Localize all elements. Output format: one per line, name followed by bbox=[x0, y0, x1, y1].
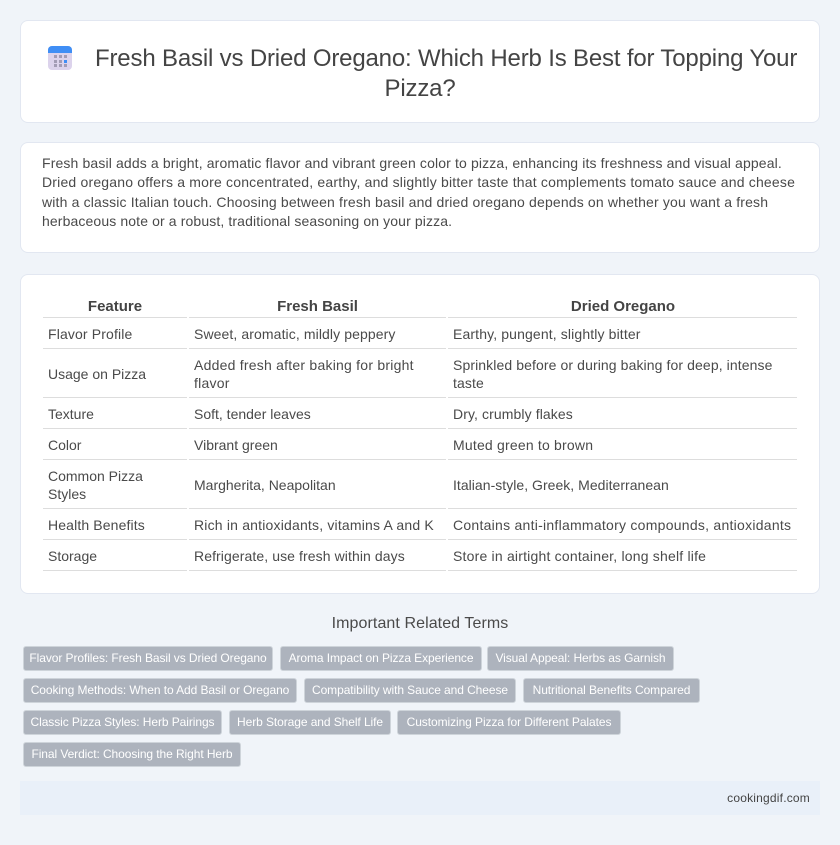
row: storage: Storage bbox=[48, 548, 97, 564]
row: texture: Texture bbox=[48, 406, 94, 422]
row: usage on pizza: flavor bbox=[194, 375, 230, 391]
icon: calendar bbox=[48, 46, 72, 70]
tags: related terms: Nutritional Benefits Compared bbox=[533, 683, 690, 697]
tags: related terms: Herb Storage and Shelf Life bbox=[237, 715, 383, 729]
row: storage bbox=[48, 548, 706, 564]
text block: intro: herbaceous note or a robust, traditional seasoning on your pizza. bbox=[42, 213, 452, 229]
row: flavor profile: Sweet, aromatic, mildly peppery bbox=[194, 326, 396, 342]
row: health benefits: Rich in antioxidants, vitamins A and K bbox=[194, 517, 434, 533]
row: flavor profile bbox=[48, 326, 641, 342]
text block: intro: Fresh basil adds a bright, aromatic flavor and vibrant green color to pizza, enhancing its freshness and visual appeal. bbox=[42, 155, 782, 171]
row: texture: Dry, crumbly flakes bbox=[453, 406, 573, 422]
table: feature comparison bbox=[43, 298, 797, 571]
row: common pizza styles: Margherita, Neapolitan bbox=[194, 477, 336, 493]
row: flavor profile: Earthy, pungent, slightly bitter bbox=[453, 326, 641, 342]
row: common pizza styles: Styles bbox=[48, 486, 86, 502]
row: usage on pizza: Sprinkled before or during baking for deep, intense bbox=[453, 357, 773, 373]
row: color: Vibrant green bbox=[194, 437, 278, 453]
row: texture bbox=[48, 406, 573, 422]
table header bbox=[88, 298, 675, 315]
tags: related terms: Classic Pizza Styles: Herb Pairings bbox=[31, 715, 214, 729]
tags: related terms: Compatibility with Sauce and Cheese bbox=[312, 683, 508, 697]
row: color: Muted green to brown bbox=[453, 437, 593, 453]
row: health benefits: Health Benefits bbox=[48, 517, 145, 533]
row: texture: Soft, tender leaves bbox=[194, 406, 311, 422]
text block: intro: with a classic Italian touch. Choosing between fresh basil and dried oregano depends on whether you want a fresh bbox=[42, 194, 768, 210]
row: color bbox=[48, 437, 593, 453]
panel: comparison table bbox=[20, 274, 820, 594]
tags: related terms: Final Verdict: Choosing the Right Herb bbox=[31, 747, 233, 761]
table header: Feature bbox=[88, 298, 142, 315]
row: health benefits: Contains anti-inflammatory compounds, antioxidants bbox=[453, 517, 791, 533]
title: Fresh Basil vs Dried Oregano: Which Herb Is Best for Topping Your bbox=[95, 45, 797, 72]
footer source: cookingdif.com bbox=[727, 791, 810, 805]
text block: intro: Dried oregano offers a more concentrated, earthy, and slightly bitter taste that complements tomato sauce and cheese bbox=[42, 174, 795, 190]
table header: Fresh Basil bbox=[277, 298, 358, 315]
panel: intro paragraph bbox=[20, 142, 820, 253]
row: common pizza styles: Italian-style, Greek, Mediterranean bbox=[453, 477, 669, 493]
tags: related terms: Aroma Impact on Pizza Experience bbox=[289, 651, 473, 665]
table header: Dried Oregano bbox=[571, 298, 675, 315]
row: health benefits bbox=[48, 517, 791, 533]
row: storage: Store in airtight container, long shelf life bbox=[453, 548, 706, 564]
row: usage on pizza: Usage on Pizza bbox=[48, 366, 146, 382]
title bbox=[95, 45, 797, 102]
row: usage on pizza: Added fresh after baking for bright bbox=[194, 357, 414, 373]
tags: related terms: Flavor Profiles: Fresh Basil vs Dried Oregano bbox=[29, 651, 267, 665]
title: Pizza? bbox=[384, 75, 456, 102]
row: usage on pizza: taste bbox=[453, 375, 484, 391]
footer bar bbox=[20, 781, 820, 815]
row: color: Color bbox=[48, 437, 81, 453]
panel: header card bbox=[20, 20, 820, 123]
tags: related terms: Visual Appeal: Herbs as Garnish bbox=[495, 651, 666, 665]
row: common pizza styles: Common Pizza bbox=[48, 468, 143, 484]
tags: related terms: Customizing Pizza for Different Palates bbox=[407, 715, 611, 729]
row: flavor profile: Flavor Profile bbox=[48, 326, 132, 342]
row: usage on pizza bbox=[48, 357, 773, 391]
tags: related terms: Cooking Methods: When to Add Basil or Oregano bbox=[31, 683, 289, 697]
tags: related terms bbox=[23, 646, 700, 767]
heading: important related terms: Important Related Terms bbox=[332, 615, 508, 632]
row: storage: Refrigerate, use fresh within days bbox=[194, 548, 405, 564]
text block: intro bbox=[42, 155, 795, 229]
row: common pizza styles bbox=[48, 468, 669, 502]
